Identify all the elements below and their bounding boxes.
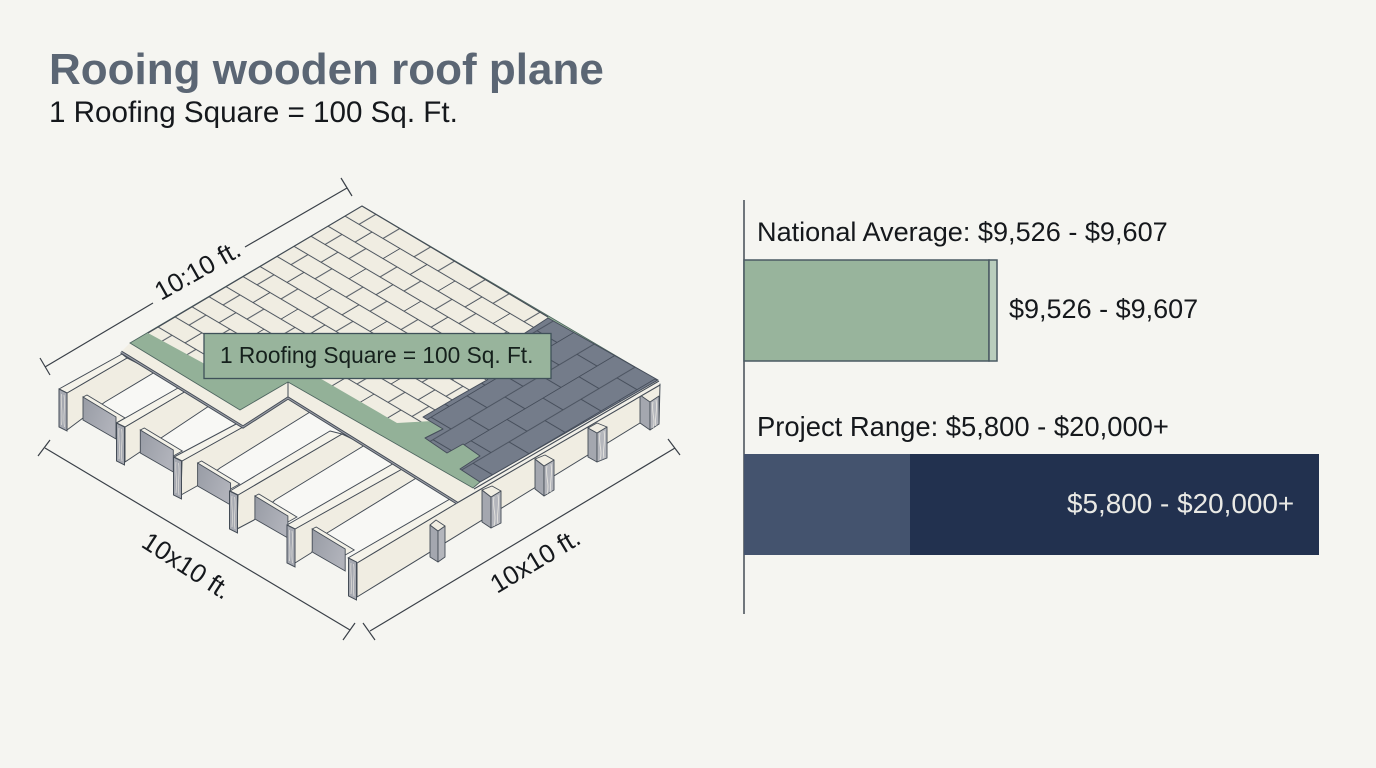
rim blocks [430,395,659,562]
callout: roofing square: 1 Roofing Square = 100 Sq. Ft. [220,342,533,368]
sheathing strip [121,343,473,503]
title: Rooing wooden roof plane [49,45,604,94]
label: national average: National Average: $9,526 - $9,607 [757,216,1168,247]
joist end grain faces [59,389,356,600]
dimension: top edge [40,178,352,375]
dimension: bottom left edge [38,440,355,640]
gray asphalt shingles [423,318,658,482]
dimension: bottom right edge [363,439,680,640]
value: national average: $9,526 - $9,607 [1009,294,1198,324]
joist 2 [116,388,212,462]
bar: national average [744,260,997,361]
rim joist [348,384,660,597]
blocking between joists [83,395,354,571]
dimension label: bottom left: 10x10 ft. [137,526,237,605]
eave flashing [457,378,660,503]
label: project range: Project Range: $5,800 - $20,000+ [757,411,1169,442]
joist 5 [287,462,418,563]
joist 1 [59,354,155,430]
dimension label: top: 10:10 ft. [149,234,246,306]
joist 3 [174,398,310,495]
sheathing lower edge [121,352,457,503]
value: project range: $5,800 - $20,000+ [1067,488,1294,519]
roof illustration [59,206,660,600]
cream field shingles [148,206,548,423]
callout: roofing square [204,334,551,378]
chart axis [743,200,745,614]
green underlayment [130,206,657,488]
floor gaps between joists [83,340,460,557]
subtitle: 1 Roofing Square = 100 Sq. Ft. [49,96,458,129]
dimension label: bottom right: 10x10 ft. [485,522,586,599]
bar: project range [744,454,1319,555]
joist 4 [230,431,365,529]
